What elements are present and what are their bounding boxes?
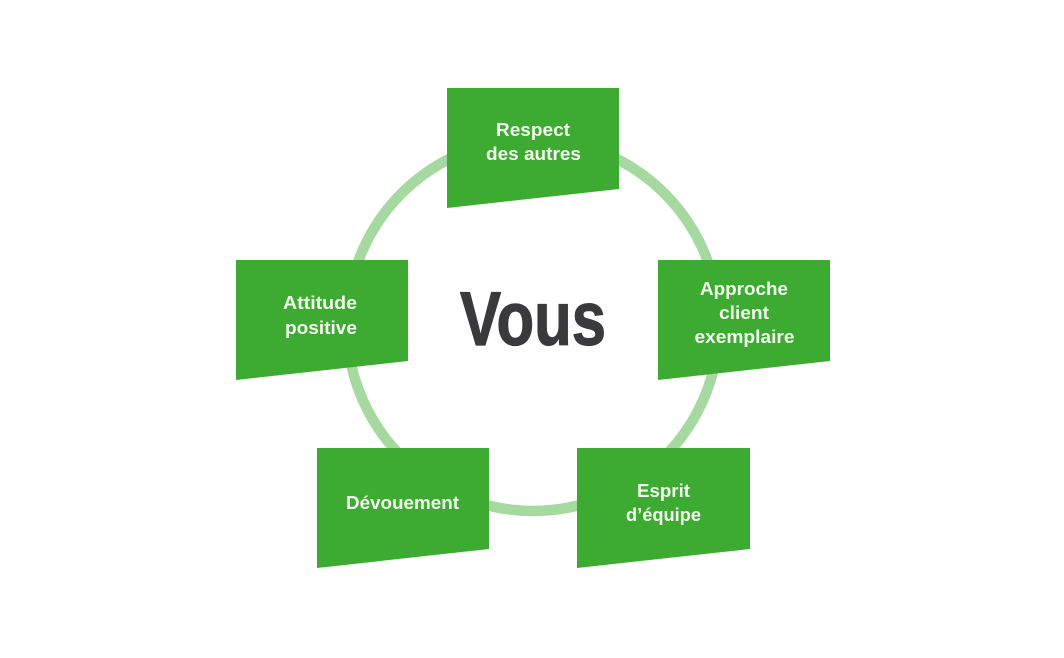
box: Attitude positive [236, 260, 408, 380]
box: Dévouement: Dévouement [346, 492, 459, 513]
box: Respect des autres: des autres [486, 143, 581, 164]
box: Esprit d'équipe [577, 448, 750, 568]
box: Dévouement [317, 448, 489, 568]
box: Approche client exemplaire: exemplaire [694, 326, 794, 347]
center label: Vous: Vous [460, 277, 606, 362]
box: Esprit d'équipe: d’équipe [626, 504, 701, 525]
ring connecting the values [347, 139, 719, 511]
box: Attitude positive: Attitude [283, 292, 357, 313]
box: Respect des autres: Respect [496, 119, 570, 140]
box: Respect des autres [447, 88, 619, 208]
box: Esprit d'équipe: Esprit [637, 480, 690, 501]
box: Approche client exemplaire: client [719, 302, 769, 323]
box: Approche client exemplaire [658, 260, 830, 380]
box: Approche client exemplaire: Approche [700, 278, 788, 299]
box: Attitude positive: positive [285, 317, 357, 338]
